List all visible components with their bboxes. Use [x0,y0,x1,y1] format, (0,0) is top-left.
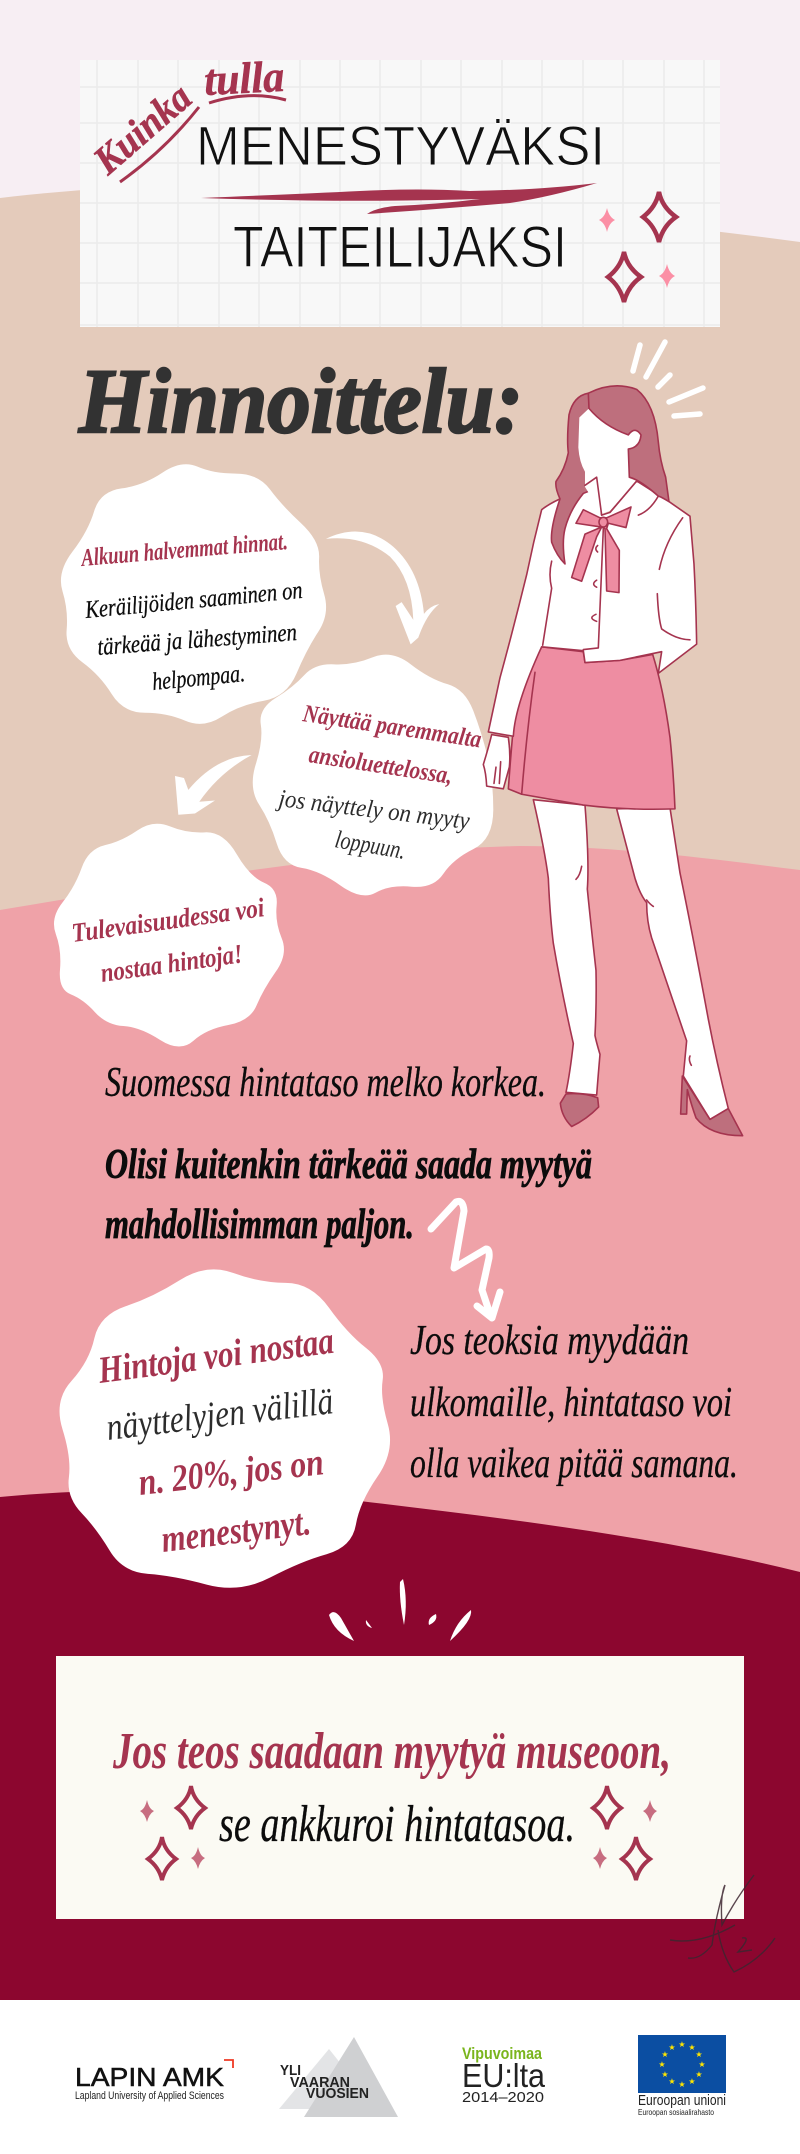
speech blob: CV [253,655,493,895]
text: sell as much as possible [105,1142,592,1248]
right sparkles [593,1786,657,1880]
logo: European Union: Euroopan unioni [638,2092,726,2109]
icon: burst lines [329,1579,471,1641]
arrow: to second blob [326,532,439,644]
left sparkles [140,1786,205,1880]
logo: Vipuvoimaa EU:lta: Vipuvoimaa [462,2044,542,2063]
brush stroke divider [201,183,597,214]
text: sell as much as possible: mahdollisimman paljon. [105,1202,414,1248]
bow [572,507,631,593]
EU stars: ★ [695,2050,703,2059]
shoe right [681,1076,743,1136]
EU stars: ★ [698,2060,706,2069]
title: Kuinka tulla: Kuinka [84,74,200,183]
EU stars: ★ [668,2077,676,2086]
text: selling abroad [410,1318,738,1487]
text: sell as much as possible: Olisi kuitenkin tärkeää saada myytyä [105,1142,592,1188]
speech blob: CV: loppuun. [333,826,408,865]
speech blob: raising prices: n. 20%, jos on [136,1441,326,1504]
hand [483,735,510,789]
logo: Yli vaaran vuosien: VAARAN [290,2074,350,2091]
jacket [488,477,697,736]
speech blob: cheaper prices: tärkeää ja lähestyminen [96,619,298,661]
title: MENESTYVÄKSI: MENESTYVÄKSI [196,114,605,177]
speech blob: cheaper prices: Keräilijöiden saaminen on [83,577,304,624]
speech blob: cheaper prices: Alkuun halvemmat hinnat. [79,528,289,572]
left leg [533,800,600,1095]
skirt pleat [522,672,535,794]
bow knot [599,517,608,527]
callout line two: se ankkuroi hintatasoa. [219,1796,575,1853]
speech blob: raising prices [60,1269,390,1588]
logo: Vipuvoimaa EU:lta [462,2044,546,2106]
hair [551,386,669,564]
title: Kuinka tulla [84,52,286,183]
icon: title sparkles [599,192,676,302]
panel: museum callout [56,1656,744,1919]
logo: Yli vaaran vuosien: VUOSIEN [306,2085,369,2102]
shoe left [560,1094,599,1126]
EU stars: ★ [688,2043,696,2052]
speech blob: cheaper prices [61,464,326,724]
buttons [592,545,598,621]
logo: Yli vaaran vuosien [279,2037,398,2117]
illustration: woman figure [483,386,743,1136]
speech blob: raising prices: näyttelyjen välillä [104,1380,335,1449]
text: price level: Suomessa hintataso melko korkea. [105,1060,546,1106]
logo: Lapin AMK: Lapland University of Applied Sciences [75,2090,224,2102]
EU stars: ★ [695,2070,703,2079]
logo: Yli vaaran vuosien: YLI [280,2062,301,2079]
skirt [508,647,675,809]
right leg [617,808,728,1119]
heading: Hinnoittelu: [78,350,523,452]
title: TAITEILIJAKSI: TAITEILIJAKSI [233,215,567,280]
speech blob: CV: jos näyttely on myyty [275,785,472,835]
icon: attention lines [633,342,703,416]
title: Kuinka tulla: tulla [203,52,285,105]
speech blob: future prices [54,824,284,1047]
EU stars: ★ [678,2080,686,2089]
EU stars: ★ [688,2077,696,2086]
speech blob: raising prices: menestynyt. [159,1501,313,1561]
EU stars: ★ [661,2050,669,2059]
artist signature [670,1875,775,1972]
EU stars: ★ [668,2043,676,2052]
EU stars: ★ [658,2060,666,2069]
logo: Lapin AMK: LAPIN AMK [75,2062,225,2092]
EU stars: ★ [661,2070,669,2079]
speech blob: CV: ansioluettelossa, [307,741,455,790]
speech blob: future prices: nostaa hintoja! [99,938,244,988]
face and neck [578,408,641,514]
logo: Lapin AMK [75,2060,233,2102]
speech blob: cheaper prices: helpompaa. [151,660,246,696]
speech blob: future prices: Tulevaisuudessa voi [70,892,266,948]
knee details [576,866,691,1065]
arrow: to third blob [175,755,252,815]
jacket inner lines [543,496,690,650]
arrow: squiggle [431,1201,500,1318]
speech blob: raising prices: Hintoja voi nostaa [95,1320,336,1392]
EU stars [658,2040,706,2089]
logo: European Union: Euroopan sosiaalirahasto [638,2107,714,2117]
logo: Vipuvoimaa EU:lta: 2014–2020 [462,2089,544,2106]
logo: European Union [638,2035,726,2117]
hairline and collar [585,393,641,515]
logo: Vipuvoimaa EU:lta: EU:lta [462,2057,546,2094]
EU stars: ★ [678,2040,686,2049]
panel: title paper [80,60,720,327]
speech blob: CV: Näyttää paremmalta [300,700,483,754]
text: selling abroad: Jos teoksia myydään [410,1318,689,1364]
